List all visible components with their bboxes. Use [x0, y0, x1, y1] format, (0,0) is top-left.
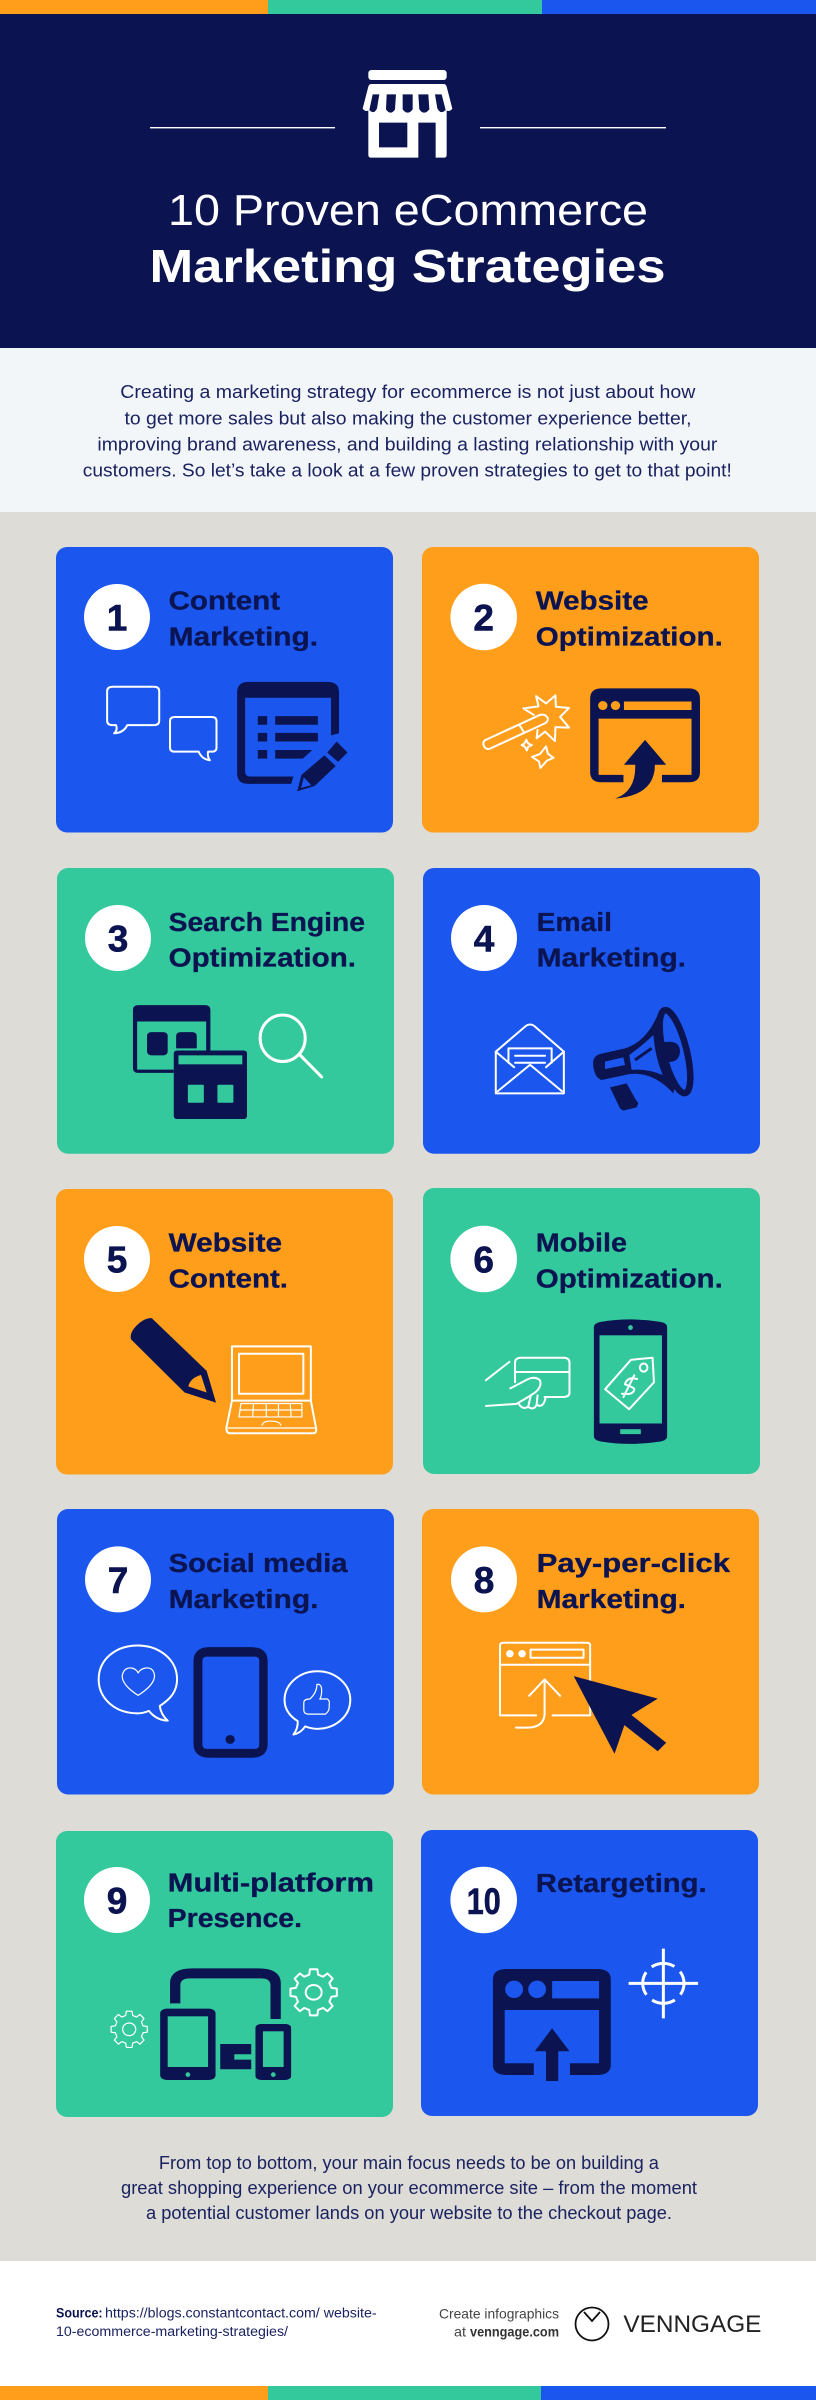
icon: browser click and cursor [500, 1643, 666, 1754]
heading 3: Optimization. [169, 945, 356, 973]
heading 5: Website [169, 1230, 282, 1258]
panel: card 1 content marketing [56, 547, 393, 832]
create infographics note [439, 2306, 559, 2340]
number badge 2 [450, 584, 517, 650]
divider line right [480, 127, 666, 128]
heading 1 [169, 588, 318, 652]
heading 9: Presence. [168, 1905, 302, 1933]
heading 6 [536, 1230, 723, 1294]
heading 3 [169, 909, 365, 973]
heading 6: Mobile [536, 1230, 627, 1258]
intro text: Creating a marketing strategy for ecommerce is not just about how [120, 382, 696, 402]
number badge 2: 2 [473, 598, 494, 638]
title [150, 186, 666, 292]
number badge 10: 10 [467, 1881, 501, 1922]
source text: https://blogs.constantcontact.com/ website- [105, 2306, 377, 2321]
heading 5: Content. [169, 1266, 288, 1294]
number badge 4 [451, 905, 517, 971]
heading 8: Pay-per-click [537, 1550, 731, 1578]
intro text: customers. So let’s take a look at a few proven strategies to get to that point! [83, 460, 732, 480]
panel: footer [0, 2261, 816, 2386]
panel: header [0, 14, 816, 348]
top colour strip [0, 0, 816, 14]
source text: Source: [56, 2306, 103, 2321]
number badge 1: 1 [107, 598, 127, 638]
panel: card 5 website content [56, 1189, 393, 1474]
intro text: improving brand awareness, and building a lasting relationship with your [97, 434, 717, 454]
number badge 8: 8 [474, 1560, 494, 1601]
number badge 8 [451, 1546, 517, 1612]
number badge 1 [84, 584, 150, 650]
heading 9: Multi-platform [168, 1870, 374, 1898]
panel: card 4 email marketing [423, 868, 760, 1154]
panel: card 6 mobile optimization [423, 1188, 760, 1474]
icon: card in hand and phone with price tag [486, 1319, 667, 1444]
create infographics note: Create infographics [439, 2306, 559, 2322]
heading 4 [537, 909, 686, 973]
heading 2 [536, 588, 723, 652]
heading 2: Optimization. [536, 624, 723, 652]
source text: 10-ecommerce-marketing-strategies/ [56, 2324, 288, 2339]
bottom colour strip [0, 2386, 816, 2400]
icon: magic wand and browser with arrow [483, 688, 700, 799]
number badge 3 [85, 905, 151, 971]
number badge 7 [85, 1546, 151, 1612]
heading 3: Search Engine [169, 909, 365, 937]
number badge 10 [450, 1867, 517, 1933]
number badge 4: 4 [474, 918, 495, 960]
number badge 5 [84, 1226, 150, 1292]
icon: pencil and laptop [131, 1318, 316, 1433]
heading 7: Marketing. [169, 1586, 318, 1614]
intro text: to get more sales but also making the customer experience better, [124, 408, 691, 428]
panel: intro [0, 348, 816, 512]
logo: venngage: VENNGAGE [623, 2311, 761, 2338]
heading 5 [169, 1230, 288, 1294]
icon: social bubbles and phone [99, 1646, 350, 1758]
number badge 5: 5 [107, 1240, 127, 1280]
title: Marketing Strategies [150, 240, 666, 292]
heading 4: Marketing. [537, 945, 686, 973]
heading 7 [169, 1550, 349, 1614]
icon: browser windows and magnifier [133, 1005, 322, 1119]
heading 1: Marketing. [169, 624, 318, 652]
closing text [121, 2153, 697, 2223]
icon: browser with arrow and crosshair [493, 1949, 698, 2081]
heading 10: Retargeting. [536, 1870, 707, 1898]
heading 2: Website [536, 588, 648, 616]
icon: storefront [363, 70, 452, 158]
heading 1: Content [169, 588, 281, 616]
number badge 6: 6 [473, 1240, 494, 1280]
icon: envelope [496, 1025, 564, 1093]
panel: card 7 social media marketing [57, 1509, 394, 1794]
number badge 3: 3 [108, 918, 128, 960]
intro text [83, 382, 732, 480]
logo: venngage [576, 2308, 761, 2340]
heading 8 [537, 1550, 731, 1614]
panel: card 3 search engine optimization [57, 868, 394, 1154]
panel: card 10 retargeting [421, 1830, 758, 2116]
heading 4: Email [537, 909, 612, 937]
heading 8: Marketing. [537, 1586, 686, 1614]
closing text: a potential customer lands on your website to the checkout page. [146, 2203, 672, 2223]
number badge 9: 9 [107, 1880, 127, 1922]
title: 10 Proven eCommerce [168, 186, 648, 235]
number badge 6 [450, 1226, 517, 1292]
divider line left [150, 127, 335, 128]
heading 6: Optimization. [536, 1266, 723, 1294]
icon: speech bubbles and document with pencil [107, 682, 347, 791]
heading 7: Social media [169, 1550, 349, 1578]
number badge 9 [84, 1867, 150, 1933]
panel: card 2 website optimization [422, 547, 759, 832]
panel: card 8 pay-per-click marketing [422, 1509, 759, 1794]
panel: card 9 multi-platform presence [56, 1831, 393, 2117]
heading 9 [168, 1870, 374, 1933]
closing text: From top to bottom, your main focus needs to be on building a [159, 2153, 660, 2173]
icon: devices and gears [111, 1968, 337, 2080]
create infographics note: venngage.com [470, 2324, 559, 2340]
source text [56, 2306, 377, 2339]
icon: megaphone [593, 1007, 697, 1111]
closing text: great shopping experience on your ecommerce site – from the moment [121, 2178, 697, 2198]
create infographics note: at [454, 2324, 466, 2340]
number badge 7: 7 [108, 1560, 128, 1601]
